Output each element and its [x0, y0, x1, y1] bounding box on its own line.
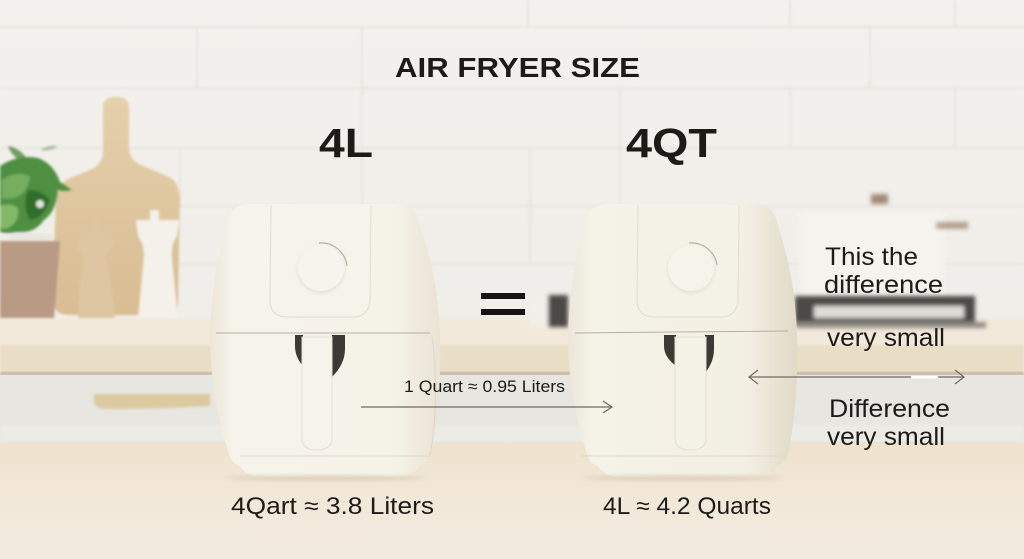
white salt mill: [136, 210, 180, 318]
text: difference very small: very small: [827, 423, 945, 451]
text: this the difference very small: very small: [827, 324, 945, 352]
equals sign: [481, 293, 525, 315]
gold drawer handle: [94, 394, 210, 409]
flower pot: [0, 241, 60, 318]
text: this the difference very small: This the: [825, 243, 918, 271]
caption: 4 liters in quarts: 4L ≈ 4.2 Quarts: [603, 493, 771, 520]
plant: [0, 146, 72, 241]
handle dark sides: [664, 335, 714, 373]
text: this the difference very small: [824, 243, 945, 352]
text: this the difference very small: difference: [824, 271, 943, 299]
heading: 4QT: 4QT: [626, 120, 717, 166]
caption: 4 quart in liters: 4Qart ≈ 3.8 Liters: [231, 493, 434, 520]
air fryer right: [568, 204, 797, 481]
control panel: [637, 205, 739, 317]
double arrow: difference: [749, 370, 964, 384]
heading: 4L: 4L: [319, 120, 373, 166]
handle: [675, 337, 706, 450]
text: difference very small: [827, 395, 950, 451]
base shadow: [225, 475, 425, 481]
handle dark sides: [295, 335, 345, 377]
title: AIR FRYER SIZE: [395, 52, 640, 83]
front counter: [0, 442, 1024, 559]
knob: [668, 247, 714, 293]
pot on stove: [800, 194, 968, 303]
conversion label: 1 quart: 1 Quart ≈ 0.95 Liters: [404, 377, 565, 396]
arrow: conversion: [361, 401, 612, 413]
body: [568, 204, 797, 477]
stove grate: [530, 295, 986, 328]
air fryer left: [210, 204, 440, 481]
cutting board: [52, 97, 180, 315]
control panel: [270, 205, 371, 317]
drawer seam: [240, 336, 436, 456]
wooden pepper mill: [77, 218, 115, 318]
base shadow: [583, 475, 783, 481]
text: difference very small: Difference: [829, 395, 950, 423]
handle: [302, 337, 332, 450]
drawer seam: [575, 331, 788, 333]
body: [210, 204, 440, 477]
knob: [298, 247, 344, 293]
counter back: [0, 318, 1024, 346]
